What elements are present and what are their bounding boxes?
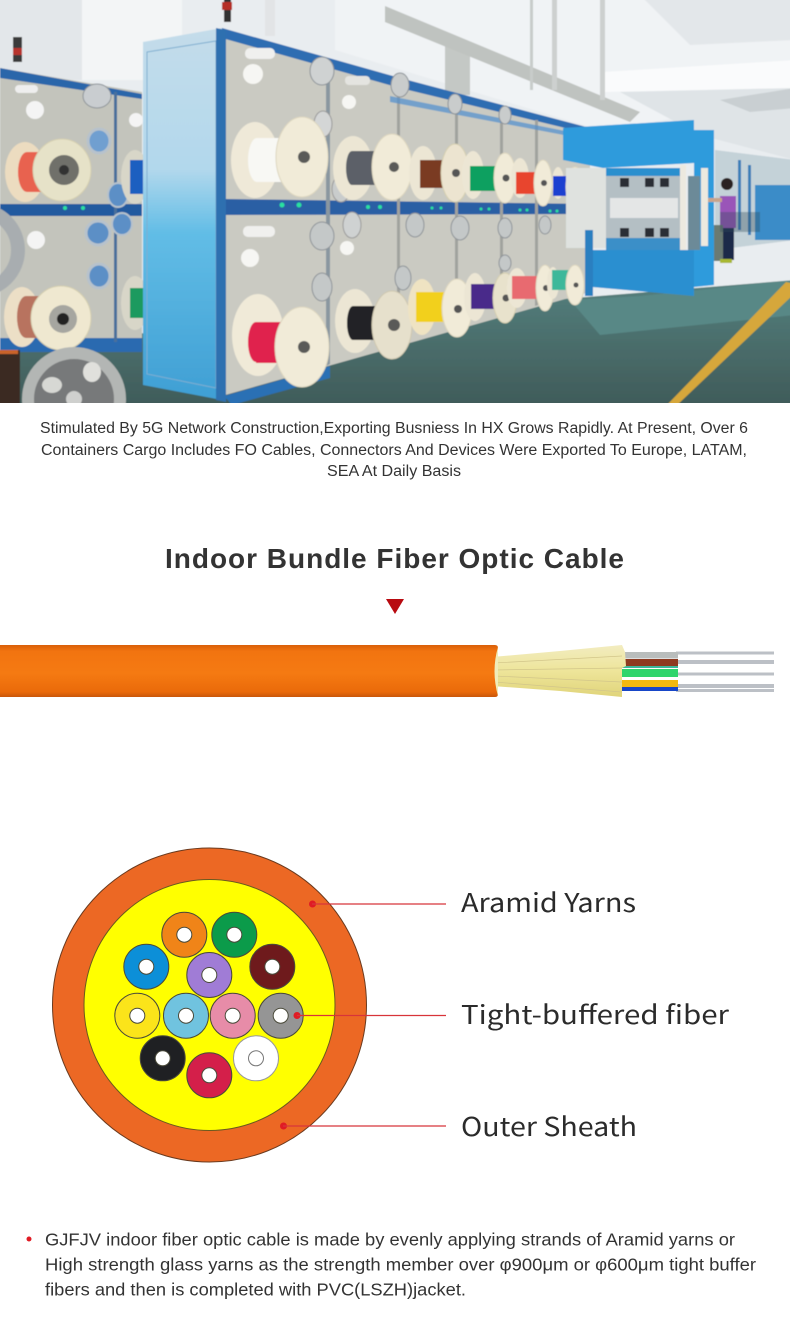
- pulleys and labels on center machine: [243, 64, 263, 84]
- spool: gray: [333, 134, 412, 200]
- spool: coral: [5, 139, 91, 202]
- intro paragraph: Stimulated By 5G Network Construction,Exporting Busniess In HX Grows Rapidly. At Present, Over 6: [40, 420, 748, 437]
- intro paragraph: SEA At Daily Basis: [327, 463, 461, 480]
- red down arrow: [386, 599, 404, 614]
- bullet description: GJFJV indoor fiber optic cable is made by evenly applying strands of Aramid yarns or: [45, 1230, 735, 1250]
- orange sheath: [0, 645, 498, 697]
- callout: aramid yarns: [309, 883, 636, 920]
- spool: orange red: [511, 158, 552, 206]
- photo: fiber optic cable factory floor: [0, 0, 790, 445]
- callout: outer sheath: Outer Sheath: [461, 1107, 637, 1144]
- cross-section diagram: [52, 848, 366, 1162]
- spool: red: [232, 294, 329, 387]
- spool: teal: [547, 265, 584, 305]
- pulley: left edge: [0, 210, 18, 290]
- far line: [720, 160, 790, 240]
- outer sheath: [52, 848, 366, 1162]
- spool: blue: [552, 166, 578, 200]
- intro paragraph: [40, 420, 748, 480]
- bare fibers: [676, 652, 774, 692]
- aramid yarn layer: [84, 880, 335, 1130]
- callout: outer sheath: [280, 1107, 637, 1144]
- callout: tight-buffered fiber: Tight-buffered fiber: [461, 995, 730, 1032]
- spool: brown: [409, 144, 469, 202]
- spool: pink red: [507, 265, 554, 311]
- tight-buffered fibers: [115, 912, 303, 1098]
- spool: purple: [464, 273, 517, 323]
- bullet description: High strength glass yarns as the strength member over φ900μm or φ600μm tight buffer: [45, 1254, 756, 1274]
- callout: aramid yarns: Aramid Yarns: [461, 883, 636, 920]
- spool: green partial: [121, 276, 144, 330]
- central tower: [222, 28, 590, 396]
- spool: black: [335, 289, 412, 359]
- bullet description: fibers and then is completed with PVC(LSZH)jacket.: [45, 1280, 466, 1300]
- cable photo: [0, 645, 774, 697]
- spool: copper: [4, 286, 91, 350]
- worker: [708, 178, 736, 263]
- blue machine: [563, 120, 694, 168]
- spool: green: [462, 151, 516, 203]
- spool: white: [231, 117, 328, 198]
- left machine: [0, 68, 142, 350]
- title: Indoor Bundle Fiber Optic Cable: [165, 543, 624, 574]
- indicator lights: [63, 202, 558, 212]
- dark stand: [0, 350, 20, 410]
- spool: yellow: [408, 279, 472, 337]
- callout: tight-buffered fiber: [294, 995, 730, 1032]
- yarn: [492, 645, 626, 697]
- bullet description: [26, 1230, 756, 1300]
- spool: blue partial: [121, 150, 144, 204]
- pulley: bottom left: [21, 346, 127, 403]
- intro paragraph: Containers Cargo Includes FO Cables, Connectors And Devices Were Exported To Europe, LATAM,: [41, 442, 747, 459]
- buffered fibers: [620, 652, 678, 691]
